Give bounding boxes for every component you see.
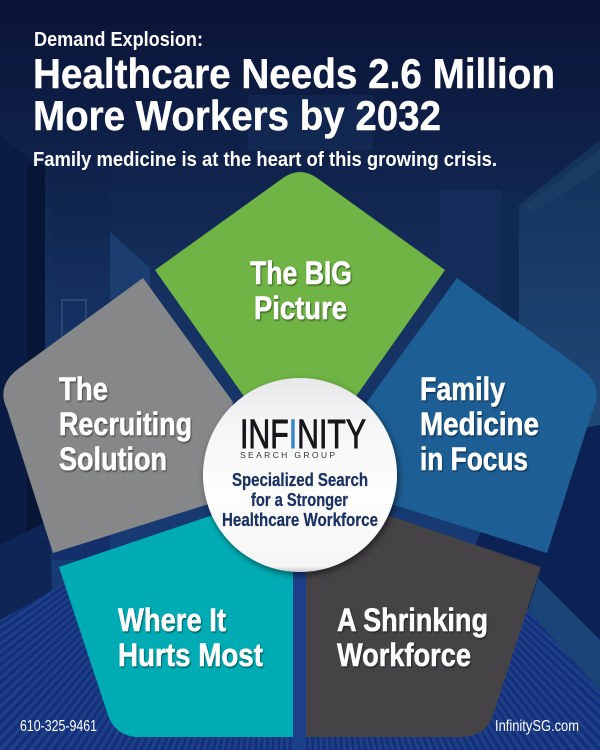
panel label: Where It (118, 602, 226, 638)
title: Healthcare Needs 2.6 Million (33, 50, 555, 97)
panel label (118, 602, 263, 673)
title: More Workers by 2032 (33, 92, 441, 139)
gray pentagon shape (3, 278, 233, 553)
teal pentagon shape (59, 500, 293, 737)
title (33, 50, 555, 139)
panel: Where It Hurts Most (59, 500, 293, 737)
panel label: Family (420, 371, 505, 407)
panel label (250, 255, 352, 326)
tagline: Specialized Search (232, 470, 368, 490)
panel: The Recruiting Solution (3, 278, 233, 553)
blue pentagon shape (367, 278, 597, 553)
footer: website: InfinitySG.com (495, 718, 579, 735)
panel label: Recruiting (59, 406, 192, 442)
panel: A Shrinking Workforce (306, 500, 541, 737)
white disc (203, 378, 397, 572)
panel label: Medicine (420, 406, 539, 442)
tagline (222, 470, 378, 530)
panel label: Workforce (337, 637, 471, 673)
panel: Family Medicine in Focus (367, 278, 597, 553)
logo: Infinity Search Group: INFINITY (240, 411, 366, 457)
panel label (420, 371, 539, 477)
center circle with logo and tagline (203, 378, 397, 572)
panel label: The (59, 371, 108, 407)
eyebrow heading: Demand Explosion: (34, 29, 203, 51)
logo: Infinity Search Group: SEARCH GROUP (240, 450, 335, 460)
panel label (337, 602, 488, 673)
panel label: Solution (59, 441, 167, 477)
panel: The BIG Picture (155, 172, 445, 402)
footer: phone number: 610-325-9461 (20, 718, 97, 735)
panel label (59, 371, 192, 477)
tagline: for a Stronger (251, 490, 348, 510)
panel label: The BIG (250, 255, 352, 291)
panel label: Hurts Most (118, 637, 263, 673)
tagline: Healthcare Workforce (222, 510, 378, 530)
dark gray pentagon shape (306, 500, 541, 737)
panel label: in Focus (420, 441, 528, 477)
panel label: A Shrinking (337, 602, 488, 638)
panel label: Picture (254, 290, 347, 326)
subtitle: Family medicine is at the heart of this growing crisis. (33, 148, 497, 171)
green pentagon shape (155, 172, 445, 402)
